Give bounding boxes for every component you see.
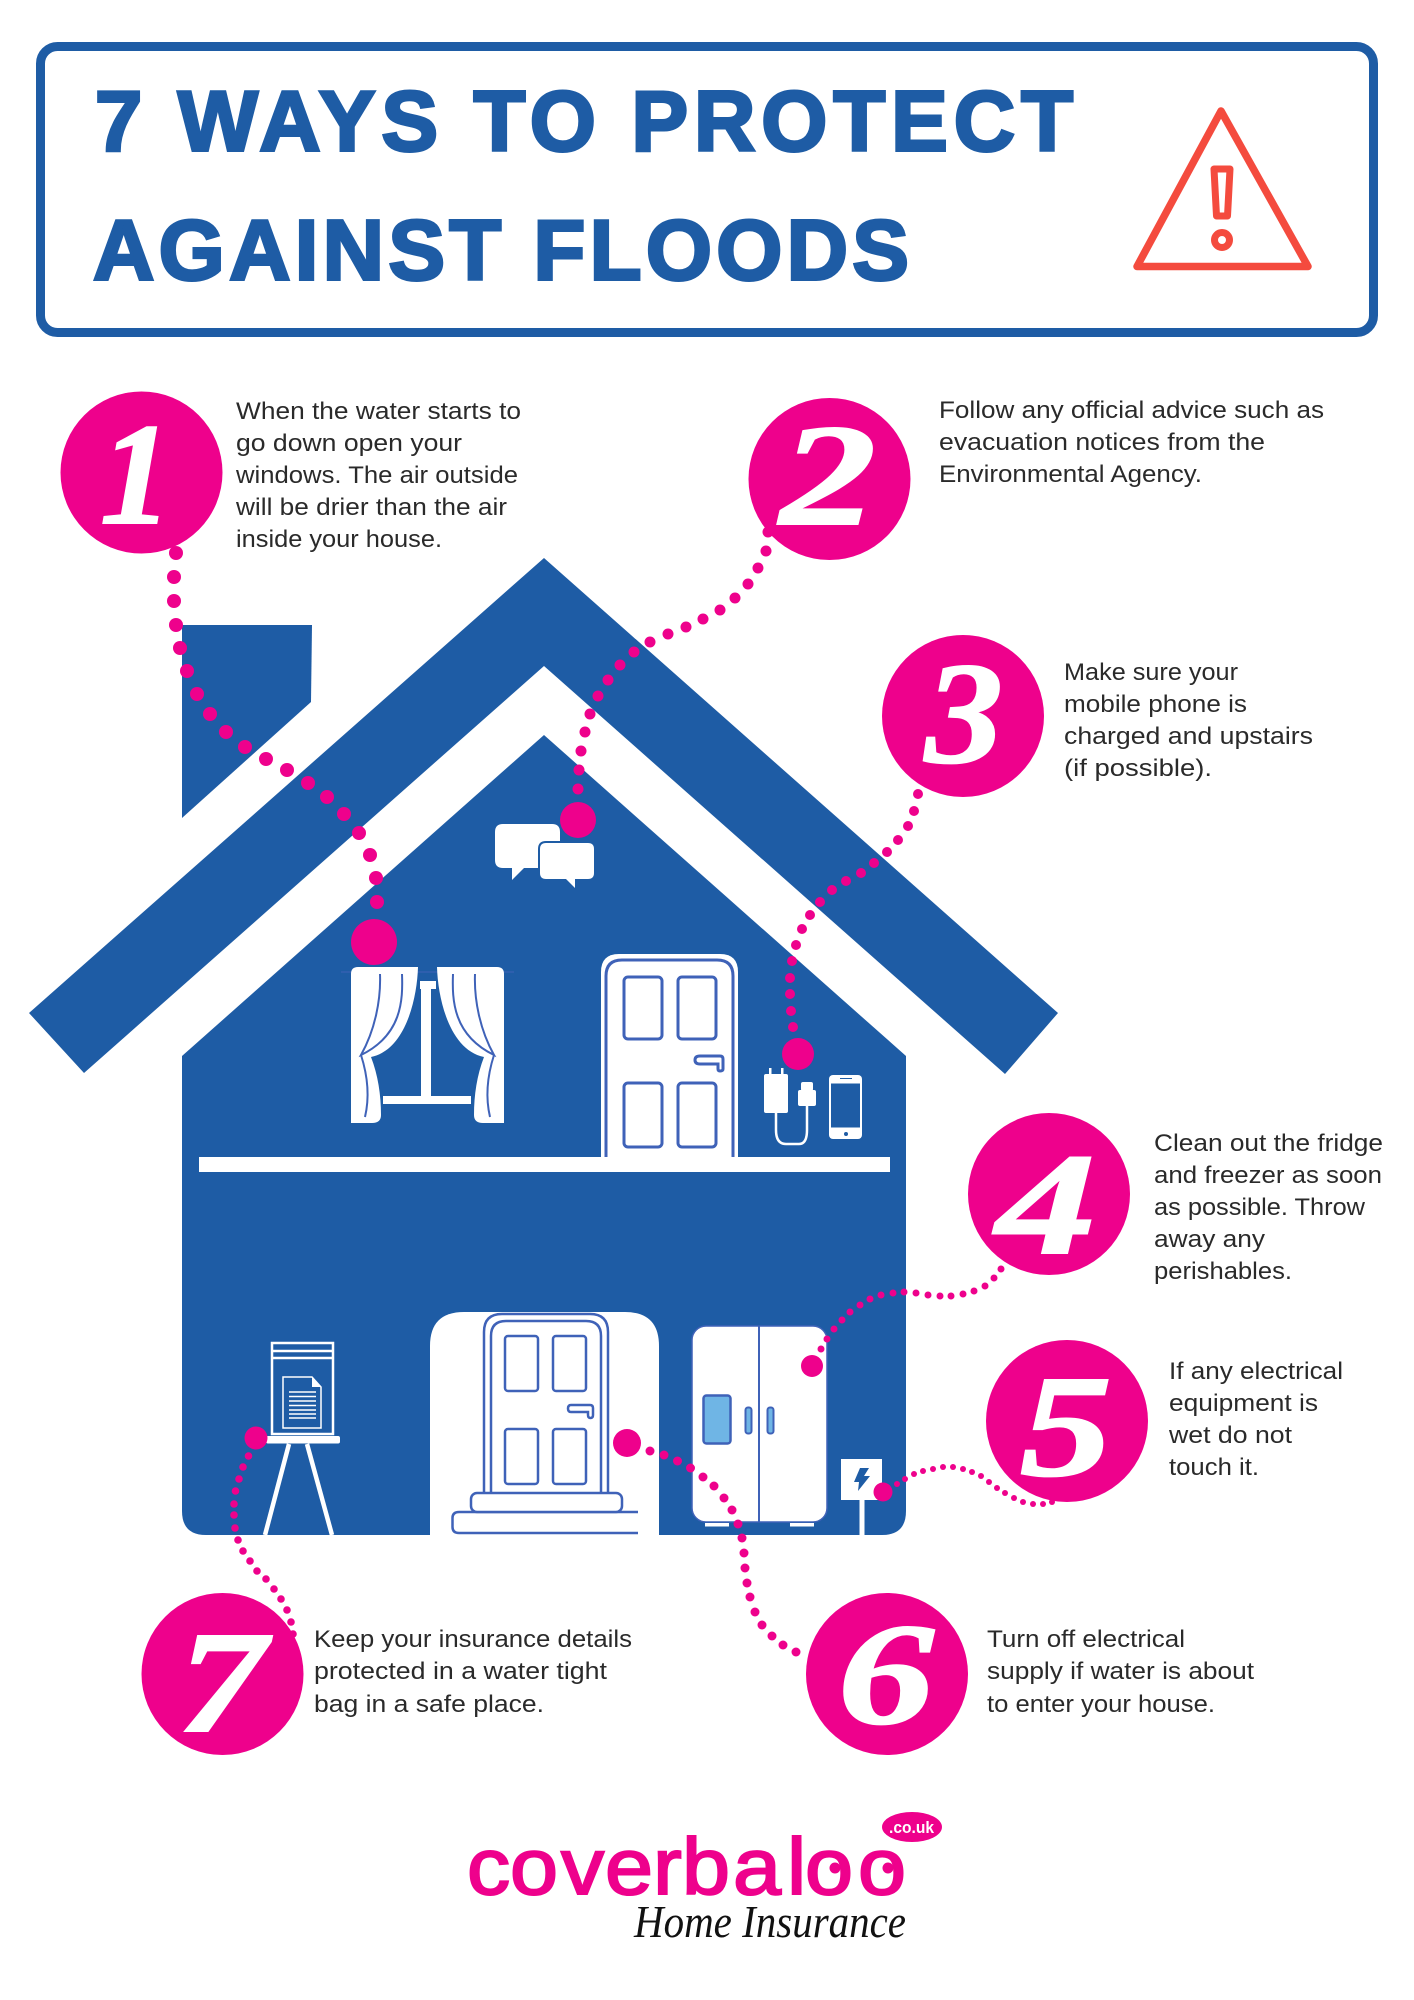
step 7 text: Keep your insurance details [314,1626,632,1653]
icon: window with curtains [341,967,514,1123]
logo: coverbaloo [467,1812,942,1947]
step 2 badge [748,396,910,560]
step 4 text: and freezer as soon [1154,1162,1382,1189]
logo: coverbaloo: .co.uk [889,1818,934,1837]
front door opening [430,1312,659,1535]
step 7 text: protected in a water tight [314,1658,607,1685]
step 4 text [1154,1130,1383,1285]
icon: warning triangle [1137,111,1308,266]
floor divider [199,1157,890,1172]
step 1 badge: 1 [100,395,172,555]
step 6 text: supply if water is about [987,1658,1254,1685]
step 6 badge: 6 [838,1595,935,1755]
step 5 text: equipment is [1169,1390,1318,1417]
icon: insurance document on easel [265,1343,340,1535]
step 3 text: (if possible). [1064,755,1212,782]
step 5 badge [986,1340,1148,1507]
step 3 badge [882,634,1044,797]
step 4 badge [968,1113,1130,1285]
icon: speech bubbles [495,824,594,888]
house body [182,735,906,1535]
step 4 text: as possible. Throw [1154,1194,1366,1221]
icon: electricity sign [841,1459,882,1535]
icon: fridge [692,1326,827,1526]
step 3 text: charged and upstairs [1064,723,1313,750]
step 3 text [1064,659,1313,782]
step 1 text: inside your house. [236,526,442,553]
dotted connector 3 [782,789,923,1070]
step 2 text: Follow any official advice such as [939,397,1324,424]
icon: mobile phone [829,1075,862,1139]
step 2 text: Environmental Agency. [939,461,1202,488]
step 7 text [314,1626,632,1718]
step 4 text: away any [1154,1226,1265,1253]
step 7 text: bag in a safe place. [314,1691,544,1718]
step 4 text: perishables. [1154,1258,1292,1285]
logo: coverbaloo: coverbaloo [467,1822,906,1911]
step 6 text: to enter your house. [987,1691,1215,1718]
step 4 badge: 4 [992,1125,1096,1285]
step 3 text: mobile phone is [1064,691,1247,718]
step 3 text: Make sure your [1064,659,1238,686]
step 5 text: touch it. [1169,1454,1259,1481]
step 3 badge: 3 [923,634,1003,794]
logo: coverbaloo: Home Insurance [633,1896,906,1947]
dotted connector 2 [560,526,774,838]
dotted connector 4 [801,1266,1004,1377]
chimney [182,625,312,818]
step 6 text: Turn off electrical [987,1626,1185,1653]
step 2 text: evacuation notices from the [939,429,1265,456]
title: 7 WAYS TO PROTECT [95,74,1073,170]
step 1 text: will be drier than the air [235,494,507,521]
step 7 badge: 7 [178,1603,273,1763]
step 1 text: go down open your [236,430,462,457]
title: AGAINST FLOODS [93,204,909,298]
icon: upstairs door [601,954,738,1157]
icon: charger [764,1068,816,1144]
house illustration [29,558,1058,1535]
dotted connector 5 [874,1464,1055,1507]
step 1 text: When the water starts to [236,398,521,425]
icon: front door [452,1314,638,1533]
step 2 badge: 2 [777,396,876,556]
step 4 text: Clean out the fridge [1154,1130,1383,1157]
step 7 badge [142,1593,304,1763]
step 5 badge: 5 [1020,1347,1112,1507]
step 1 badge [60,392,222,555]
step 1 text: windows. The air outside [235,462,518,489]
title panel [40,46,1374,332]
title [93,74,1073,298]
dotted connector 6 [613,1429,800,1656]
step 6 text [987,1626,1254,1718]
step 5 text: If any electrical [1169,1358,1343,1385]
roof [29,558,1058,1074]
step 5 text: wet do not [1168,1422,1292,1449]
step 6 badge [806,1593,968,1755]
step 1 text [235,398,521,553]
step 2 text [939,397,1324,488]
dotted connector 1 [167,546,397,965]
dotted connector 7 [230,1426,297,1638]
step 5 text [1168,1358,1343,1481]
